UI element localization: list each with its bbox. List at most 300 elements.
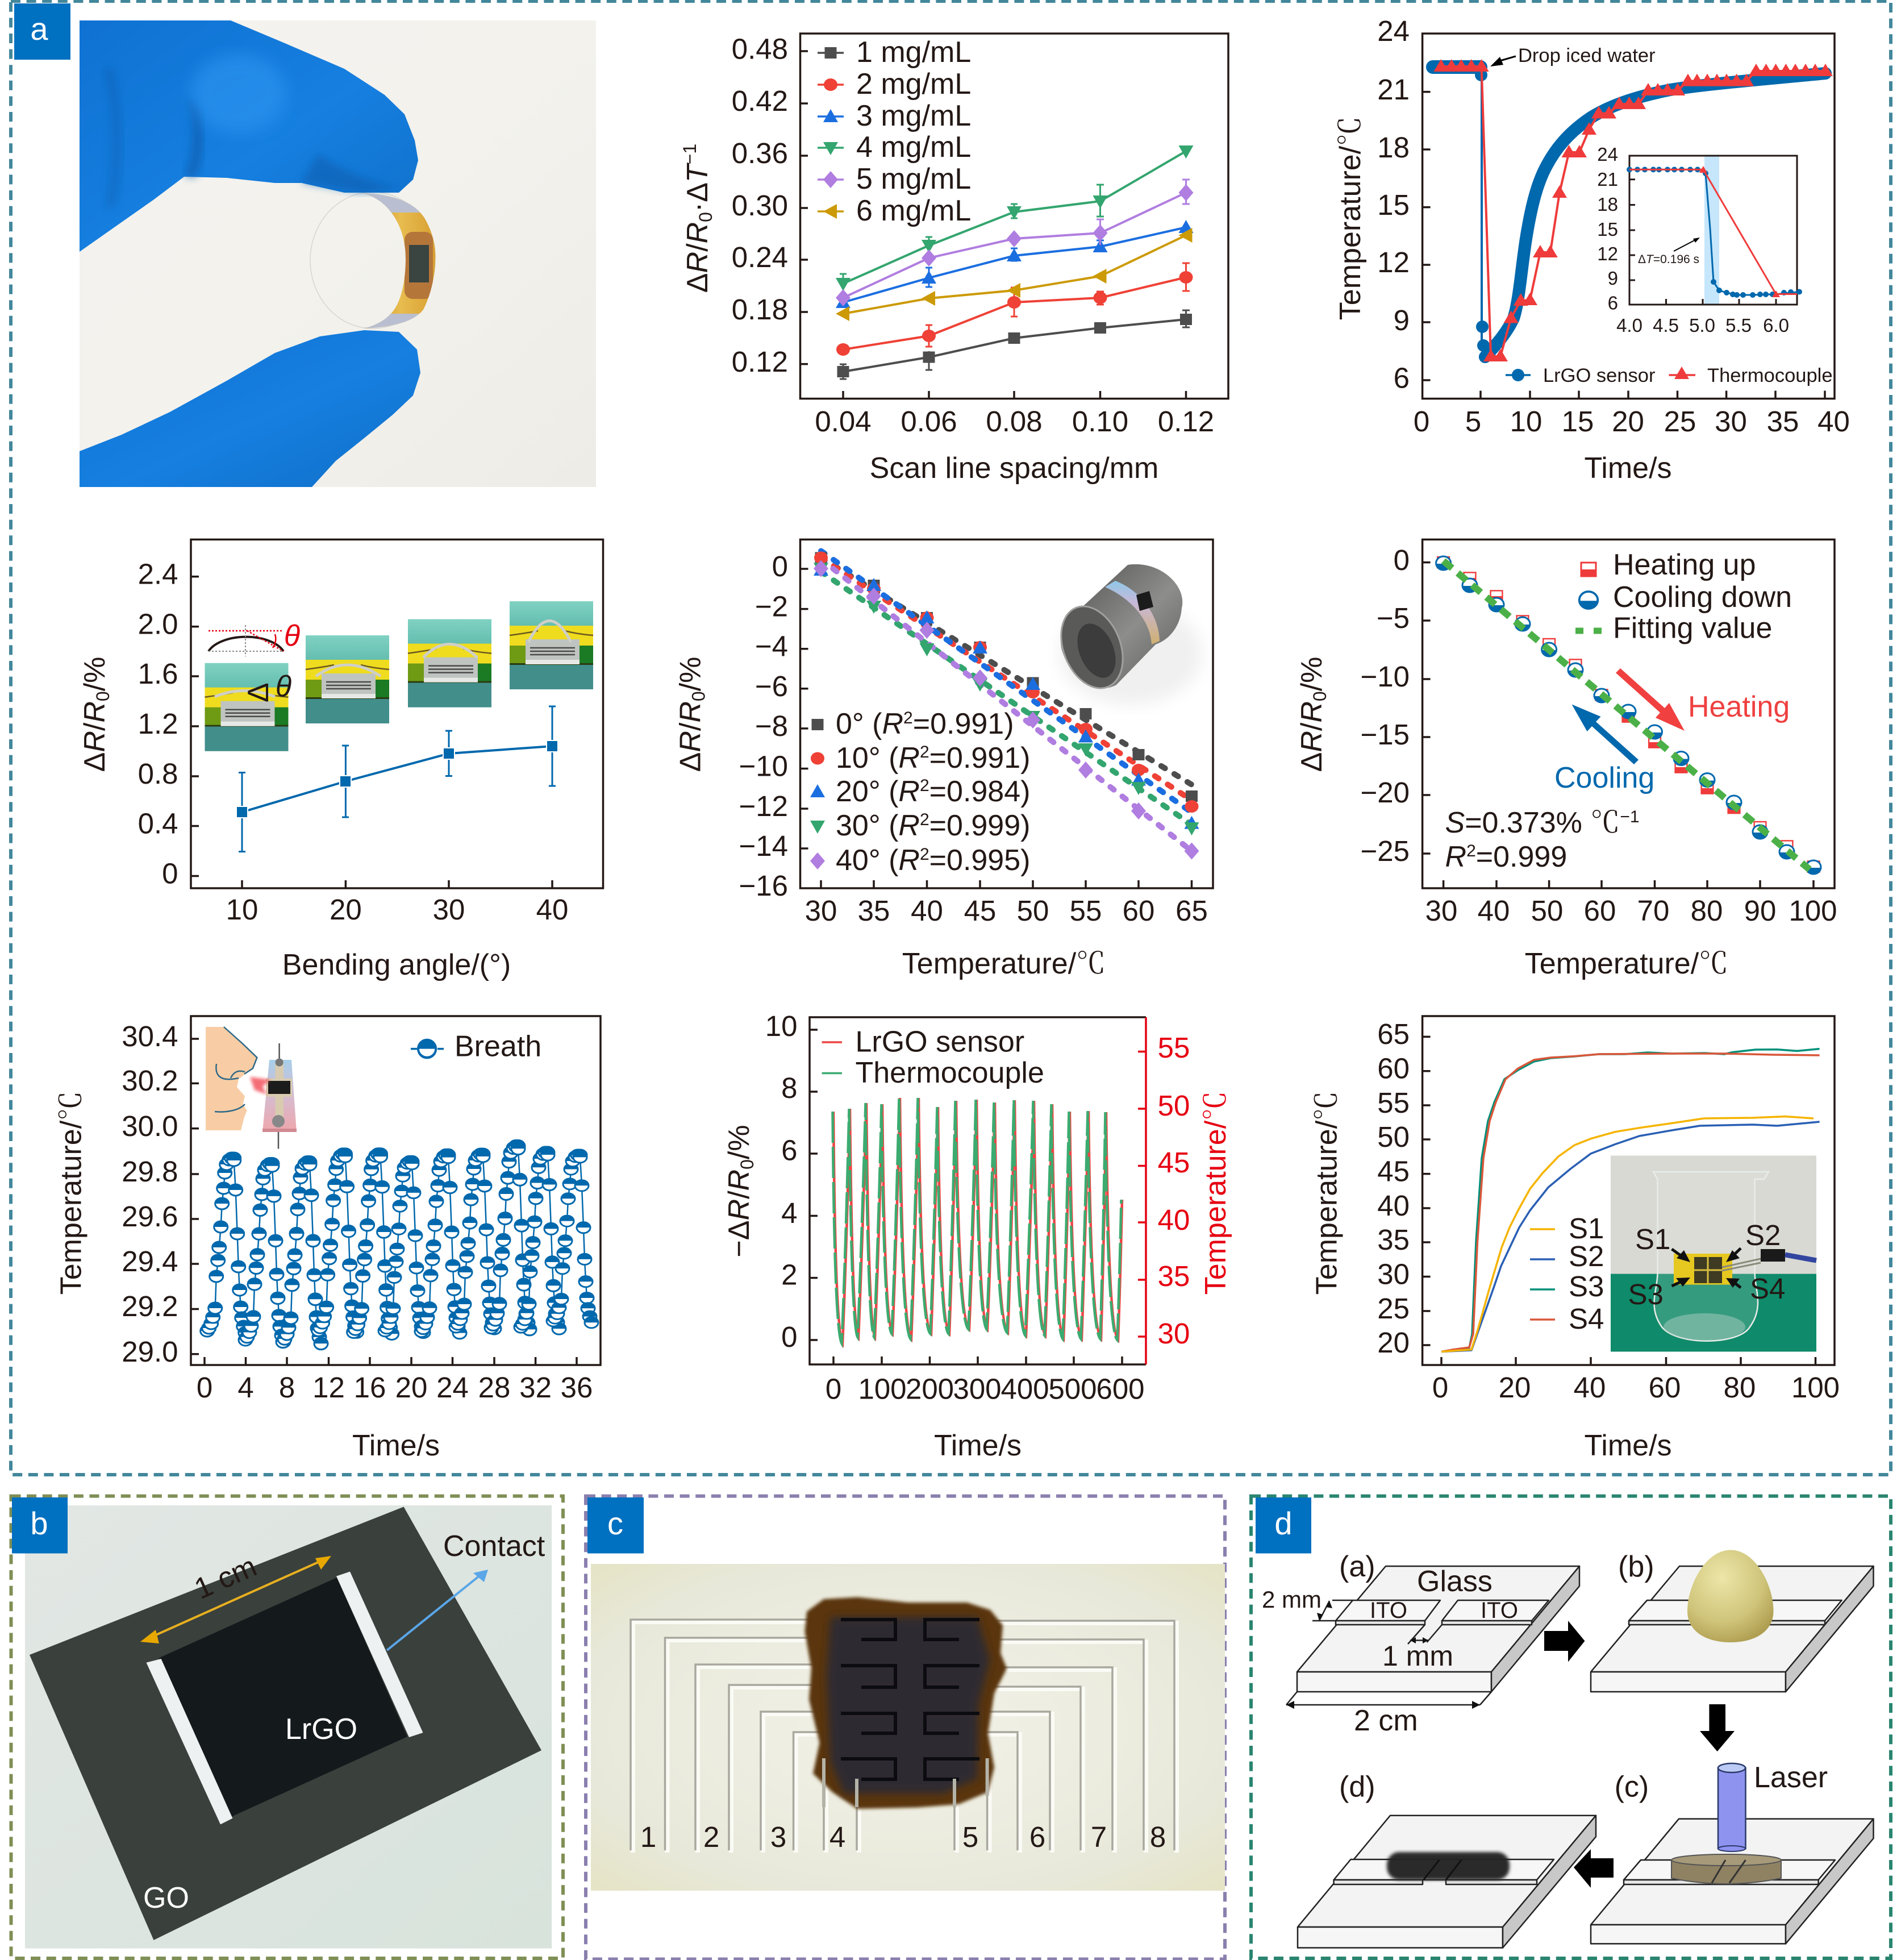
chart: resistance vs temperature at bend angles bbox=[674, 539, 1213, 982]
lead numbers: 7 bbox=[1091, 1821, 1107, 1853]
fitting line bbox=[1444, 561, 1810, 869]
x axis title: Temperature/℃ bbox=[902, 939, 1106, 982]
legend: 10° (R bbox=[836, 742, 920, 775]
y tick labels: 21 bbox=[1377, 73, 1410, 106]
x tick labels: 30 bbox=[1715, 405, 1747, 438]
legend: =0.991) bbox=[929, 742, 1030, 775]
x tick labels: 45 bbox=[964, 894, 996, 927]
step d: finished sensor: (d) bbox=[1339, 1771, 1375, 1804]
y tick labels: −6 bbox=[755, 670, 788, 702]
step b: precursor droplet on slide bbox=[1591, 1550, 1874, 1692]
bend angle diagram bbox=[209, 619, 300, 703]
left y tick labels: 4 bbox=[781, 1197, 798, 1229]
x tick labels: 30 bbox=[1425, 894, 1457, 927]
x tick labels: 600 bbox=[1096, 1373, 1145, 1405]
inset photo: sensor array on beaker: S1 bbox=[1635, 1223, 1670, 1255]
y tick labels: −5 bbox=[1377, 602, 1410, 634]
legend: Cooling down bbox=[1613, 581, 1792, 614]
legend: 6 mg/mL bbox=[856, 194, 971, 227]
series: 6 mg/mL bbox=[836, 228, 1192, 321]
legend: 5 mg/mL bbox=[856, 163, 971, 195]
y tick labels: 2.0 bbox=[138, 608, 178, 640]
legend: S1 bbox=[1569, 1212, 1604, 1245]
photo: sensor ring held by gloved fingers bbox=[80, 20, 596, 487]
axis ticks bbox=[800, 51, 1186, 399]
y tick labels: 29.6 bbox=[122, 1200, 178, 1233]
dimension label: 1 cm bbox=[190, 1550, 261, 1606]
y tick labels: 0 bbox=[162, 857, 178, 890]
y tick labels bbox=[732, 33, 788, 378]
right y tick labels bbox=[1158, 1031, 1190, 1350]
chart: sensitivity vs scan line spacing bbox=[679, 33, 1228, 485]
x tick labels: 40 bbox=[1574, 1371, 1606, 1404]
x tick labels bbox=[1414, 405, 1850, 438]
inset photo: sensor array on beaker bbox=[1611, 1156, 1816, 1351]
inset chart: response time bbox=[1597, 144, 1802, 336]
x tick labels: 0 bbox=[1432, 1371, 1448, 1404]
x tick labels: 20 bbox=[395, 1371, 427, 1404]
x tick labels: 60 bbox=[1123, 894, 1154, 927]
y tick labels: −14 bbox=[739, 830, 788, 862]
x tick labels: 0 bbox=[826, 1373, 841, 1405]
inset chart: response time: ΔT=0.196 s bbox=[1638, 253, 1699, 266]
x tick labels: 100 bbox=[858, 1373, 907, 1405]
series: 2 mg/mL bbox=[836, 263, 1193, 356]
y tick labels: 29.8 bbox=[122, 1155, 178, 1188]
x tick labels: 20 bbox=[330, 893, 362, 926]
right y tick labels: 45 bbox=[1158, 1146, 1190, 1179]
panel c: electrode array photo bbox=[586, 1496, 1225, 1959]
y tick labels: 0.30 bbox=[732, 189, 788, 222]
legend: 2 bbox=[920, 776, 929, 795]
legend: Thermocouple bbox=[856, 1056, 1044, 1089]
left y tick labels: 8 bbox=[781, 1072, 798, 1104]
label d bbox=[1256, 1497, 1311, 1554]
lead numbers: 4 bbox=[829, 1821, 845, 1853]
breath data cycles bbox=[201, 1140, 598, 1350]
chart axes frame bbox=[800, 539, 1213, 888]
inset chart: response time: 6 bbox=[1608, 293, 1618, 314]
y tick labels: 0 bbox=[772, 550, 788, 582]
x tick labels: 0.06 bbox=[901, 405, 957, 438]
x tick labels: 30 bbox=[433, 893, 465, 926]
legend: Breath bbox=[455, 1030, 541, 1063]
right y tick labels: 35 bbox=[1158, 1260, 1190, 1292]
legend: =0.991) bbox=[913, 708, 1014, 740]
chart: breath monitoring bbox=[47, 1016, 601, 1462]
y tick labels: 25 bbox=[1377, 1292, 1410, 1325]
step a labels and dimensions: 2 mm bbox=[1262, 1586, 1321, 1613]
leads over patch bbox=[824, 1758, 987, 1807]
contact strips bbox=[147, 1572, 423, 1824]
y tick labels bbox=[739, 550, 788, 902]
y axis title: /% bbox=[78, 657, 111, 691]
right y tick labels: 40 bbox=[1158, 1204, 1190, 1236]
y tick labels: 30 bbox=[1377, 1258, 1410, 1290]
step d: finished sensor bbox=[1298, 1771, 1596, 1948]
GO label: GO bbox=[143, 1882, 189, 1915]
x axis title: Time/s bbox=[1584, 1429, 1672, 1462]
y tick labels: 24 bbox=[1377, 15, 1410, 47]
legend: 40° (R bbox=[836, 844, 920, 877]
y tick labels bbox=[138, 558, 178, 890]
chart axes frame bbox=[191, 1016, 601, 1365]
series: 1 mg/mL bbox=[837, 310, 1192, 379]
chart: bending angle response bbox=[78, 539, 603, 981]
step a labels and dimensions: ITO bbox=[1481, 1598, 1518, 1623]
inset chart: response time: 4.5 bbox=[1653, 315, 1679, 336]
brown LrGO patch bbox=[805, 1597, 1007, 1809]
x tick labels: 35 bbox=[1767, 405, 1799, 438]
x tick labels bbox=[197, 1371, 593, 1404]
lead numbers: 1 bbox=[640, 1821, 656, 1853]
x tick labels: 10 bbox=[1510, 405, 1542, 438]
sensitivity annotation: 2 bbox=[1466, 842, 1476, 860]
y tick labels: 0.42 bbox=[732, 85, 788, 117]
y tick labels: 15 bbox=[1377, 189, 1410, 221]
x tick labels: 16 bbox=[354, 1371, 386, 1404]
legend: LrGO sensor bbox=[856, 1025, 1024, 1058]
legend: Fitting value bbox=[1613, 612, 1772, 645]
legend: 2 bbox=[920, 810, 929, 829]
x tick labels: 80 bbox=[1691, 894, 1723, 927]
LrGO label: LrGO bbox=[285, 1713, 357, 1746]
label c: c bbox=[607, 1505, 623, 1541]
y tick labels: −10 bbox=[739, 750, 788, 782]
legend: Heating up bbox=[1613, 548, 1756, 581]
y axis title: ΔR/R bbox=[1295, 701, 1328, 772]
x tick labels bbox=[815, 405, 1214, 438]
dotted fit lines bbox=[821, 551, 1192, 851]
y axis title: ΔR/R bbox=[674, 701, 707, 772]
arrow: b to c bbox=[1700, 1704, 1735, 1751]
y axis title: 0 bbox=[689, 691, 709, 701]
bend angle diagram: θ bbox=[284, 619, 300, 652]
x tick labels: 20 bbox=[1499, 1371, 1531, 1404]
sensitivity annotation: −1 bbox=[1620, 808, 1640, 826]
series: 20 degrees bbox=[814, 563, 1199, 829]
x tick labels: 0.04 bbox=[815, 405, 872, 438]
y tick labels: −8 bbox=[755, 710, 788, 742]
y axis title: Temperature/℃ bbox=[1302, 1091, 1345, 1295]
series: 0 degrees bbox=[815, 552, 1198, 802]
inset render: sensor on cylinder bbox=[1050, 564, 1202, 705]
right y tick labels: 50 bbox=[1158, 1089, 1190, 1122]
step c: laser reduction: (c) bbox=[1615, 1771, 1649, 1804]
annotation: drop iced water: Drop iced water bbox=[1518, 45, 1656, 66]
y tick labels: 29.0 bbox=[122, 1335, 178, 1368]
x tick labels: 65 bbox=[1175, 894, 1208, 927]
arrow and label: cooling: Cooling bbox=[1554, 761, 1654, 794]
left y tick labels: 2 bbox=[781, 1259, 798, 1291]
y tick labels: −2 bbox=[755, 590, 788, 623]
x tick labels: 40 bbox=[536, 893, 568, 926]
chart axes frame bbox=[1423, 1016, 1835, 1365]
y tick labels: 30.0 bbox=[122, 1110, 178, 1142]
y tick labels: 55 bbox=[1377, 1087, 1410, 1119]
x tick labels: 80 bbox=[1724, 1371, 1756, 1404]
inset chart: response time: 6.0 bbox=[1763, 315, 1789, 336]
step a labels and dimensions: (a) bbox=[1339, 1550, 1375, 1583]
y axis title: 0 bbox=[695, 212, 716, 222]
arrow and label: heating: Heating bbox=[1688, 690, 1790, 723]
y tick labels: −16 bbox=[739, 869, 788, 902]
heating up markers bbox=[1437, 557, 1819, 872]
legend bbox=[810, 708, 1030, 877]
right y tick labels: 30 bbox=[1158, 1317, 1190, 1350]
left y axis title: −ΔR/R bbox=[723, 1170, 756, 1258]
x axis title: Time/s bbox=[352, 1429, 440, 1462]
photo background bbox=[591, 1564, 1225, 1891]
legend: =0.984) bbox=[929, 775, 1030, 808]
y tick labels: 1.6 bbox=[138, 658, 178, 690]
step a labels and dimensions bbox=[1262, 1550, 1518, 1737]
series: 3 mg/mL bbox=[836, 220, 1193, 308]
x tick labels: 28 bbox=[478, 1371, 510, 1404]
x tick labels: 0 bbox=[197, 1371, 212, 1404]
x tick labels: 0.10 bbox=[1072, 405, 1128, 438]
legend: 2 mg/mL bbox=[856, 68, 971, 101]
contact label: Contact bbox=[443, 1530, 545, 1563]
left y tick labels: 6 bbox=[781, 1134, 798, 1167]
chart: cyclic thermal response bbox=[723, 1010, 1234, 1462]
y tick labels: 29.2 bbox=[122, 1290, 178, 1322]
inset chart: response time: 21 bbox=[1597, 169, 1618, 190]
y tick labels: 40 bbox=[1377, 1189, 1410, 1222]
y axis title: Temperature/℃ bbox=[47, 1091, 90, 1295]
y axis title: T bbox=[681, 163, 714, 182]
x axis title: Time/s bbox=[934, 1429, 1022, 1462]
series: 30 degrees bbox=[814, 563, 1199, 835]
y axis title: /% bbox=[674, 657, 707, 691]
y tick labels: 30.4 bbox=[122, 1020, 178, 1052]
legend: LrGO sensor bbox=[1543, 365, 1655, 386]
y axis title: 0 bbox=[93, 691, 113, 701]
inset chart: response time: 18 bbox=[1597, 194, 1618, 215]
y axis title: ΔR/R bbox=[78, 701, 111, 772]
panel a: measurement charts bbox=[11, 1, 1891, 1475]
inset chart: response time: 24 bbox=[1597, 144, 1618, 165]
y tick labels: 50 bbox=[1377, 1121, 1410, 1153]
left y tick labels: 0 bbox=[781, 1321, 798, 1353]
y tick labels: 6 bbox=[1394, 362, 1410, 394]
label b: b bbox=[30, 1505, 48, 1541]
left y axis title: /% bbox=[723, 1125, 756, 1159]
y tick labels: 45 bbox=[1377, 1155, 1410, 1188]
chart: heating and cooling hysteresis bbox=[1295, 539, 1837, 982]
legend: =0.999) bbox=[929, 809, 1030, 842]
LrGO square bbox=[159, 1578, 407, 1817]
x tick labels: 15 bbox=[1562, 405, 1594, 438]
y tick labels: 0.48 bbox=[732, 33, 788, 65]
y tick labels: 60 bbox=[1377, 1052, 1410, 1085]
y axis title: /% bbox=[1295, 657, 1328, 691]
x tick labels: 5 bbox=[1465, 405, 1481, 438]
sensitivity annotation bbox=[1445, 798, 1640, 873]
x tick labels bbox=[1432, 1371, 1840, 1404]
x tick labels bbox=[1425, 894, 1837, 927]
LrGO sensor curve bbox=[1433, 67, 1825, 363]
x tick labels: 90 bbox=[1744, 894, 1776, 927]
series: 4 mg/mL bbox=[836, 145, 1193, 293]
chart axes frame bbox=[191, 539, 603, 888]
right y axis title: Temperature/℃ bbox=[1191, 1091, 1234, 1295]
y tick labels: 0 bbox=[1394, 544, 1410, 576]
legend: S2 bbox=[1569, 1240, 1604, 1272]
inset photo: sensor array on beaker: S2 bbox=[1745, 1219, 1781, 1251]
legend bbox=[411, 1030, 541, 1063]
right temperature axis bbox=[1138, 1017, 1146, 1364]
contact arrow bbox=[387, 1570, 488, 1650]
x axis title: Temperature/℃ bbox=[1525, 939, 1728, 982]
y tick labels: 0.12 bbox=[732, 346, 788, 378]
x tick labels: 200 bbox=[906, 1373, 954, 1405]
x tick labels: 50 bbox=[1531, 894, 1563, 927]
x tick labels: 32 bbox=[519, 1371, 552, 1404]
y tick labels: 0.8 bbox=[138, 758, 178, 790]
bend angle diagram: θ bbox=[276, 670, 291, 703]
y axis title: ·Δ bbox=[681, 182, 714, 212]
legend: 0° (R bbox=[836, 708, 903, 740]
chart axes frame bbox=[800, 34, 1228, 399]
x tick labels: 0.12 bbox=[1158, 405, 1214, 438]
legend bbox=[1506, 365, 1833, 386]
sensitivity annotation: R bbox=[1445, 840, 1466, 873]
arrow: c to d bbox=[1574, 1849, 1614, 1888]
arrow and label: heating bbox=[1616, 668, 1790, 731]
y tick labels bbox=[1377, 1018, 1410, 1359]
lead numbers: 3 bbox=[770, 1821, 786, 1853]
panel d dashed frame bbox=[1251, 1496, 1891, 1958]
x tick labels: 36 bbox=[561, 1371, 593, 1404]
x tick labels: 500 bbox=[1048, 1373, 1097, 1405]
series: 5 mg/mL bbox=[836, 180, 1193, 306]
x tick labels: 10 bbox=[226, 893, 258, 926]
y tick labels: −4 bbox=[755, 630, 788, 663]
legend: Thermocouple bbox=[1707, 365, 1833, 386]
y tick labels: 0.24 bbox=[732, 241, 788, 273]
y tick labels: −20 bbox=[1360, 776, 1410, 809]
x tick labels: 24 bbox=[436, 1371, 469, 1404]
series: 40 degrees bbox=[814, 560, 1199, 859]
x tick labels: 300 bbox=[953, 1373, 1002, 1405]
legend bbox=[1575, 548, 1792, 645]
arrow: a to b bbox=[1544, 1621, 1585, 1662]
y tick labels bbox=[1360, 544, 1410, 867]
y tick labels: −12 bbox=[739, 790, 788, 822]
y tick labels: −15 bbox=[1360, 718, 1410, 751]
y tick labels: 2.4 bbox=[138, 558, 178, 590]
panel b: patterned LrGO photo bbox=[11, 1496, 563, 1958]
bend angle diagram: Δ bbox=[242, 683, 275, 702]
inset: nose and sensor bbox=[206, 1027, 297, 1149]
y tick labels: 0.36 bbox=[732, 137, 788, 169]
inset chart: response time: 5.5 bbox=[1725, 315, 1752, 336]
legend: 20° (R bbox=[836, 775, 920, 808]
chart: response to iced water bbox=[1326, 15, 1850, 485]
x tick labels: 0.08 bbox=[986, 405, 1043, 438]
panel b dashed frame bbox=[11, 1496, 563, 1958]
x tick labels: 60 bbox=[1649, 1371, 1681, 1404]
legend: 1 mg/mL bbox=[856, 36, 971, 69]
panel a dashed frame bbox=[11, 1, 1891, 1475]
arrow and label: cooling bbox=[1554, 705, 1654, 794]
curves S1 to S4 bbox=[1441, 1049, 1820, 1351]
lead numbers: 2 bbox=[703, 1821, 719, 1853]
panel c dashed frame bbox=[586, 1496, 1225, 1959]
y tick labels: 0.18 bbox=[732, 293, 788, 326]
y tick labels: 1.2 bbox=[138, 708, 178, 740]
y tick labels: 35 bbox=[1377, 1224, 1410, 1256]
y tick labels: 29.4 bbox=[122, 1245, 178, 1277]
x axis title: Bending angle/(°) bbox=[282, 948, 511, 981]
x tick labels: 25 bbox=[1664, 405, 1696, 438]
y tick labels: −10 bbox=[1360, 660, 1410, 693]
panel d: fabrication process bbox=[1251, 1496, 1891, 1958]
x tick labels: 100 bbox=[1789, 894, 1837, 927]
x tick labels bbox=[805, 894, 1208, 927]
step a labels and dimensions: ITO bbox=[1370, 1598, 1407, 1623]
step a labels and dimensions: Glass bbox=[1417, 1565, 1493, 1598]
chart axes frame bbox=[1423, 34, 1835, 399]
series: 10 degrees bbox=[814, 551, 1199, 813]
x tick labels: 50 bbox=[1017, 894, 1049, 927]
label d: d bbox=[1274, 1505, 1293, 1541]
inset chart: response time: 9 bbox=[1608, 268, 1618, 289]
step a: glass slide with ITO bbox=[1297, 1566, 1579, 1692]
y axis title: −1 bbox=[679, 144, 700, 164]
left y axis title: 0 bbox=[737, 1159, 757, 1170]
sensitivity annotation: =0.999 bbox=[1476, 840, 1567, 873]
step b: precursor droplet on slide: (b) bbox=[1618, 1550, 1654, 1583]
legend bbox=[822, 1025, 1044, 1089]
label a bbox=[14, 3, 70, 60]
left y tick labels bbox=[765, 1010, 798, 1353]
step a labels and dimensions: 1 mm bbox=[1382, 1640, 1453, 1672]
legend: 3 mg/mL bbox=[856, 99, 971, 132]
x axis title: Scan line spacing/mm bbox=[870, 452, 1158, 485]
y axis title: 0 bbox=[1310, 691, 1330, 701]
sensitivity annotation: S=0.373% ℃ bbox=[1445, 798, 1620, 841]
thermocouple curve bbox=[1433, 59, 1833, 361]
x tick labels: 20 bbox=[1612, 405, 1644, 438]
y tick labels: 0.4 bbox=[138, 807, 178, 840]
legend: 4 mg/mL bbox=[856, 131, 971, 164]
x tick labels: 0 bbox=[1414, 405, 1429, 438]
x tick labels: 35 bbox=[858, 894, 890, 927]
inset chart: response time: 15 bbox=[1597, 219, 1618, 240]
y tick labels: 65 bbox=[1377, 1018, 1410, 1050]
label b bbox=[12, 1497, 68, 1554]
dual curves bbox=[833, 1098, 1122, 1343]
lead numbers: 5 bbox=[962, 1821, 978, 1853]
step a labels and dimensions: 2 cm bbox=[1354, 1704, 1418, 1737]
inset chart: response time: 12 bbox=[1597, 243, 1618, 264]
y tick labels: 20 bbox=[1377, 1326, 1410, 1359]
legend: 2 bbox=[920, 743, 929, 761]
legend: 2 bbox=[920, 845, 929, 864]
data series with error bars bbox=[236, 706, 558, 852]
x tick labels: 40 bbox=[911, 894, 943, 927]
y tick labels bbox=[1377, 15, 1410, 394]
y tick labels bbox=[122, 1020, 178, 1368]
y tick labels: 9 bbox=[1394, 304, 1410, 336]
inset chart: response time: 5.0 bbox=[1689, 315, 1715, 336]
y tick labels: −25 bbox=[1360, 835, 1410, 867]
inset chart: response time: 4.0 bbox=[1616, 315, 1642, 336]
lead numbers: 8 bbox=[1150, 1821, 1166, 1853]
x tick labels bbox=[226, 893, 568, 926]
